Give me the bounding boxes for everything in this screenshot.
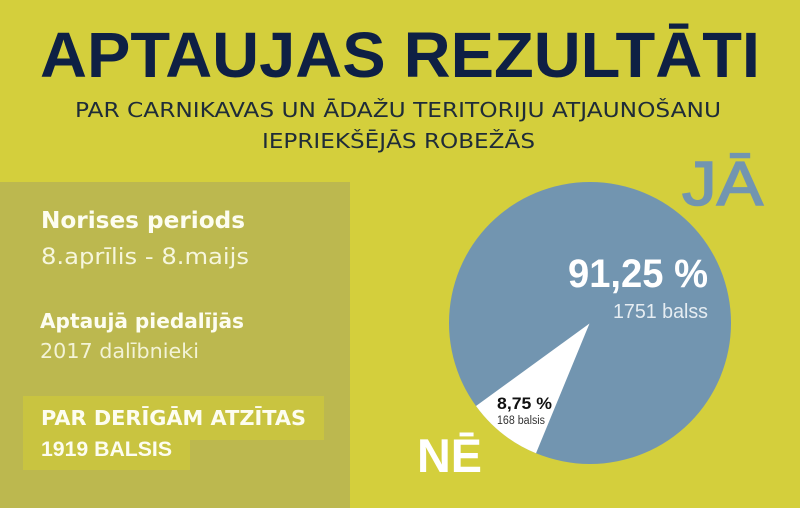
label: yes: JĀ — [682, 150, 764, 219]
label: no: NĒ — [417, 429, 482, 482]
participants count: 2017 dalībnieki — [40, 339, 199, 363]
subtitle — [75, 98, 721, 153]
pie chart — [449, 182, 731, 464]
participants heading: Aptaujā piedalījās — [40, 309, 244, 333]
callout: valid votes: PAR DERĪGĀM ATZĪTAS — [41, 406, 306, 430]
no percentage: 8,75 % — [497, 394, 552, 413]
title: APTAUJAS REZULTĀTI — [40, 19, 760, 91]
callout: valid votes — [23, 396, 324, 470]
yes votes: 1751 balss — [613, 300, 708, 323]
yes percentage: 91,25 % — [568, 252, 708, 296]
callout: valid votes: 1919 BALSIS — [41, 438, 172, 461]
period heading: Norises periods — [41, 208, 245, 234]
subtitle: PAR CARNIKAVAS UN ĀDAŽU TERITORIJU ATJAUNOŠANU — [75, 98, 721, 122]
subtitle: IEPRIEKŠĒJĀS ROBEŽĀS — [262, 129, 535, 153]
panel: survey details — [0, 182, 350, 508]
period dates: 8.aprīlis - 8.maijs — [41, 245, 249, 270]
no votes: 168 balsis — [497, 415, 545, 427]
